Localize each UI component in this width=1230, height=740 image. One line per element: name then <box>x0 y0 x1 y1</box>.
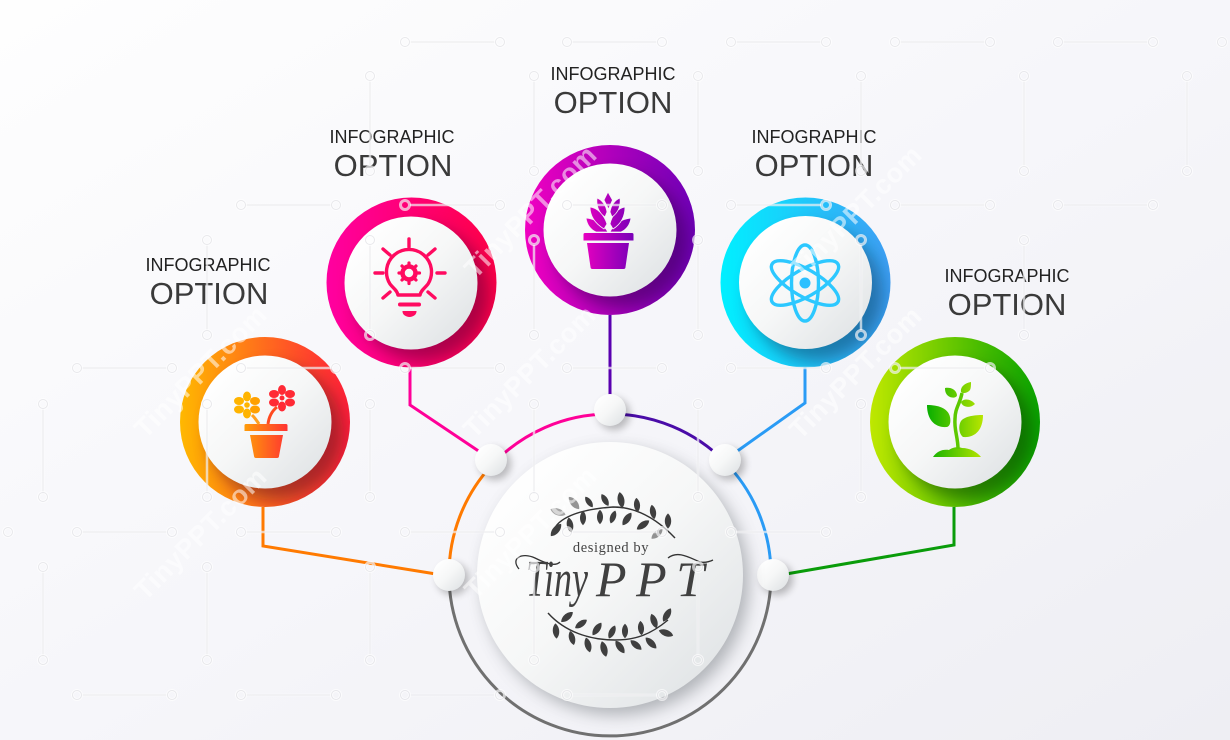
watermark text: TinyPPT.com <box>783 139 928 284</box>
watermark text: TinyPPT.com <box>458 460 603 605</box>
logo: designed by: designed by <box>573 540 649 556</box>
circle: purple option <box>525 145 695 315</box>
connector: purple <box>608 315 612 398</box>
heading: option 1 <box>145 255 271 311</box>
knob: left <box>433 559 469 595</box>
heading: option 5: INFOGRAPHIC <box>944 266 1070 286</box>
central disc with logo <box>477 442 749 715</box>
watermark text: TinyPPT.com <box>128 461 273 606</box>
connector: green <box>786 507 954 574</box>
connector: pink <box>410 367 480 452</box>
heading: option 3 <box>550 64 676 120</box>
connector: blue <box>736 367 805 452</box>
logo: script name <box>516 551 713 608</box>
watermark text: TinyPPT.com <box>783 300 928 445</box>
hub ring arcs <box>449 414 771 736</box>
logo: script name: PPT <box>595 551 707 607</box>
heading: option 2: OPTION <box>334 148 452 183</box>
icon: flowers in pot <box>234 385 295 458</box>
watermark text: TinyPPT.com <box>457 299 602 444</box>
circle: blue option <box>720 198 890 368</box>
logo: script name: Tiny <box>526 551 589 608</box>
heading: option 1: INFOGRAPHIC <box>145 255 271 275</box>
watermark text: TinyPPT.com <box>128 299 273 444</box>
watermark text <box>128 139 928 606</box>
heading: option 4: INFOGRAPHIC <box>751 127 877 147</box>
knob: right <box>757 559 793 595</box>
knob: upper left <box>475 444 511 480</box>
heading: option 5 <box>944 266 1070 322</box>
heading: option 4 <box>751 127 877 183</box>
icon: atom <box>765 245 845 321</box>
knob: top <box>594 394 630 430</box>
icon: potted succulent <box>584 192 634 269</box>
circle: pink option <box>326 198 496 368</box>
heading: option 3: INFOGRAPHIC <box>550 64 676 84</box>
logo: bottom laurel <box>548 607 674 658</box>
connector: orange <box>263 507 436 574</box>
heading: option 3: OPTION <box>554 85 672 120</box>
heading: option 2: INFOGRAPHIC <box>329 127 455 147</box>
heading: option 5: OPTION <box>948 287 1066 322</box>
heading: option 2 <box>329 127 455 183</box>
watermark text: TinyPPT.com <box>458 139 603 284</box>
knob: upper right <box>709 444 745 480</box>
heading: option 4: OPTION <box>755 148 873 183</box>
icon: sprout <box>927 382 983 457</box>
heading: option 1: OPTION <box>150 276 268 311</box>
logo: top laurel <box>548 492 675 541</box>
circle: orange option <box>180 337 350 507</box>
circle: green option <box>870 337 1040 507</box>
icon: light bulb with gear <box>375 239 445 316</box>
